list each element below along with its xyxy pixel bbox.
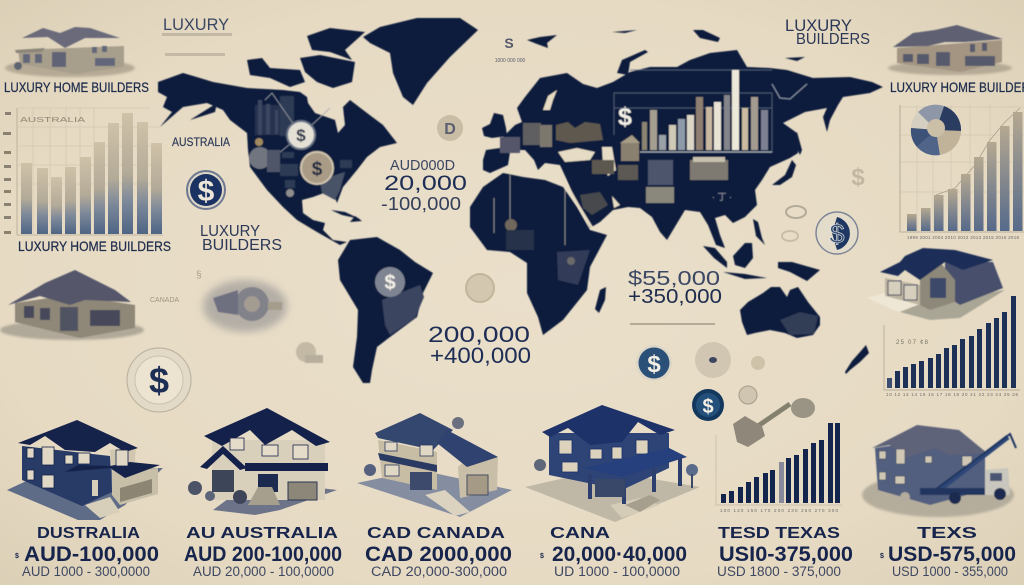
panel: Australia house one: [7, 420, 163, 579]
Europe and Asia details: [500, 70, 807, 215]
label block: TEXS: [917, 525, 977, 542]
small grey building: [267, 150, 280, 172]
house with truck: [862, 425, 1016, 517]
house three: [357, 413, 512, 517]
callout: 200,000 range: +400,000: [430, 343, 531, 368]
island: New Zealand: [845, 345, 869, 374]
label block: $: [15, 553, 19, 560]
faint coin: Atlantic north: [437, 115, 463, 141]
label block: $: [540, 553, 544, 560]
bar chart: top right: [900, 105, 1024, 240]
South America details: [375, 267, 424, 335]
Australia stippled region: [780, 312, 818, 335]
label block: [540, 525, 687, 579]
heading: LUXURY HOME BUILDERS top left: LUXURY HOME BUILDERS: [4, 79, 149, 95]
callout: 55,000 range: $55,000: [628, 268, 720, 290]
panel: top left: [3, 15, 282, 254]
chart caption: AUSTRALIA: [20, 117, 86, 124]
heading: LUXURY BUILDERS right: BUILDERS: [796, 31, 870, 48]
label block: [365, 525, 512, 579]
city grid: [255, 96, 294, 136]
coin: dollar left: [187, 171, 225, 209]
axis ticks: [3, 112, 11, 234]
faint key object: [296, 342, 323, 363]
continent: Eurasia: [483, 50, 883, 248]
callout: 200,000 range: [428, 322, 531, 368]
label block: USD 1000 - 355,000: [892, 564, 1008, 579]
bar chart on Asia: [642, 70, 768, 150]
machinery block: [646, 160, 674, 203]
pin marker East Africa: [567, 257, 575, 265]
Red Sea: [564, 180, 592, 228]
label block: AU AUSTRALIA: [186, 525, 339, 542]
coin: blue dollar small: $: [702, 396, 714, 418]
label block: 20,000·40,000: [552, 543, 687, 566]
label block: CAD 2000,000: [365, 543, 512, 566]
heading: LUXURY: LUXURY: [163, 15, 229, 34]
callout: 55,000 range: [628, 268, 722, 308]
heading: LUXURY BUILDERS left: LUXURY: [200, 223, 260, 240]
small amber marker: [255, 138, 263, 146]
coin: large dollar: $: [149, 360, 169, 401]
panel: Canada house two: [525, 405, 700, 579]
small round marker: [286, 189, 294, 197]
inland seas: [543, 90, 620, 208]
house: middle right: [867, 248, 1005, 320]
label block: USI0-375,000: [719, 543, 853, 566]
faint coin beside key: [739, 386, 757, 404]
icon: key: [733, 398, 815, 447]
panel: Canada house one: [357, 413, 512, 579]
label block: [184, 525, 342, 579]
coin: dollar left: $: [198, 175, 215, 208]
pin marker Sahara: [505, 219, 517, 231]
island: Britain and Ireland: [482, 113, 507, 138]
label block: USD-575,000: [888, 543, 1016, 566]
label block: CANA: [550, 525, 611, 542]
coin: blue dollar large: $: [647, 351, 661, 378]
continent: Greenland: [363, 18, 478, 105]
faint marker: §: [196, 270, 202, 281]
continent: Australia: [740, 287, 820, 338]
coin: right: $: [829, 219, 845, 249]
label block: AUD 20,000 - 100,0000: [193, 564, 334, 579]
panel: middle left: [0, 35, 526, 412]
continent: South America: [338, 237, 433, 383]
panel: Texas house: [862, 425, 1016, 579]
house: top right: [888, 25, 1012, 75]
coin: United States: $: [312, 159, 323, 180]
axis labels: 10 12 13 14 15 16 17 18 19 20 21 22 23 24 25 26: [886, 392, 1018, 397]
label: Australia: AUSTRALIA: [172, 135, 230, 149]
faint small sphere: [751, 356, 765, 370]
label block: AUD 1000 - 300,0000: [22, 564, 150, 579]
coin: South America: $: [384, 272, 396, 294]
heading: LUXURY BUILDERS left: [200, 223, 282, 254]
faint dollar: top centre: 1000 000 000: [495, 58, 526, 64]
callout: AUD range: [381, 157, 467, 214]
line trace: [772, 84, 807, 99]
islands: Svalbard and arctic Europe: [527, 30, 805, 75]
faint caption lines: [162, 33, 232, 56]
callout: 200,000 range: 200,000: [428, 322, 530, 347]
panel: Australia house two: [184, 408, 342, 579]
label block: [15, 525, 159, 579]
house on map: [618, 135, 640, 180]
faint dollar: top centre: S: [504, 35, 514, 51]
Arabian shaded block: [580, 192, 608, 215]
caption line under callout: [630, 323, 715, 325]
island: Japan: [772, 132, 802, 185]
buildings: Europe row: [500, 122, 614, 174]
dollar sign on map: $: [618, 103, 632, 131]
bar chart: right lower: [884, 296, 1020, 397]
panel: lower middle coins: [636, 342, 815, 447]
coin: large dollar: [127, 348, 191, 412]
North America details: [249, 93, 352, 200]
cream building block: [690, 160, 728, 180]
x axis labels: 1999 2001 2004 2010 2012 2013 2015 2016 2018: [907, 235, 1019, 240]
panel: Texas chart: [716, 423, 853, 579]
label block: AUD-100,000: [24, 543, 159, 566]
coin: blue dollar small: [692, 389, 724, 421]
label block: AUD 200-100,000: [184, 543, 342, 566]
panel: top right: [782, 17, 1024, 397]
label block: $: [880, 553, 884, 560]
faint coin: Atlantic north: D: [444, 121, 456, 138]
heading: LUXURY BUILDERS left: BUILDERS: [202, 237, 282, 254]
continent: North America: [158, 73, 397, 245]
faint ring: [786, 206, 806, 218]
label block: [880, 525, 1016, 579]
islands: South East Asia: [703, 219, 820, 281]
pin lines: [494, 175, 565, 245]
arctic islands: [190, 28, 365, 120]
label block: CAD 20,000-300,000: [371, 564, 507, 579]
faint dollar: top centre: [495, 35, 526, 64]
small white text marks in China: · 丁 ·: [712, 192, 732, 202]
faint dollar: Pacific: $: [851, 164, 865, 191]
coin: blue dollar large: [636, 345, 672, 381]
chart frame: [614, 70, 772, 152]
island: Madagascar: [595, 287, 606, 313]
label block: TESD TEXAS: [718, 525, 840, 542]
Caribbean islands: [331, 210, 362, 222]
faint coin: Atlantic south: [466, 274, 494, 302]
East Africa shaded block: [557, 250, 590, 285]
label block: UD 1000 - 100,0000: [554, 564, 680, 579]
house one: [7, 420, 163, 520]
world map: [158, 18, 883, 383]
house two: [188, 408, 337, 515]
connector lines: [265, 93, 330, 158]
coin: right: [816, 212, 858, 254]
chart caption: 25 07 ¢8: [896, 340, 929, 346]
coin: Canada: $: [296, 126, 306, 145]
pie chart: [911, 105, 961, 155]
device cluster: [203, 280, 287, 332]
callout: 55,000 range: +350,000: [628, 286, 722, 308]
continent: Africa: [470, 173, 607, 335]
label block: USD 1800 - 375,000: [717, 564, 841, 579]
bar chart: Texas: [716, 423, 842, 513]
house: middle left: [0, 270, 144, 340]
label block: CAD CANADA: [367, 525, 506, 542]
heading: LUXURY BUILDERS right: [785, 17, 870, 48]
callout: AUD range: -100,000: [381, 194, 461, 214]
coin: west coast: [249, 147, 271, 169]
Africa details: [494, 175, 590, 285]
house: top left: [5, 27, 135, 77]
caption: Canada faint: CANADA: [150, 297, 180, 304]
Sahel shaded block: [506, 230, 534, 250]
callout: AUD range: AUD000D: [390, 157, 455, 174]
label block: [717, 525, 853, 579]
faint ring pair: [782, 231, 798, 241]
heading: LUXURY BUILDERS right: LUXURY: [785, 17, 852, 35]
faint disc: [695, 342, 731, 378]
bar chart: left: [3, 108, 163, 235]
stippled region: eastern United States: [320, 172, 345, 200]
callout: AUD range: 20,000: [384, 172, 467, 195]
axis labels: 100 120 150 170 200 230 250 270 300: [720, 508, 838, 513]
stippled region: Brazil: [382, 285, 424, 335]
heading: LUXURY HOME BUILDERS chart: LUXURY HOME BUILDERS: [18, 238, 171, 254]
label block: DUSTRALIA: [37, 525, 140, 542]
house four: [525, 405, 700, 522]
interior blocks: [280, 152, 352, 188]
